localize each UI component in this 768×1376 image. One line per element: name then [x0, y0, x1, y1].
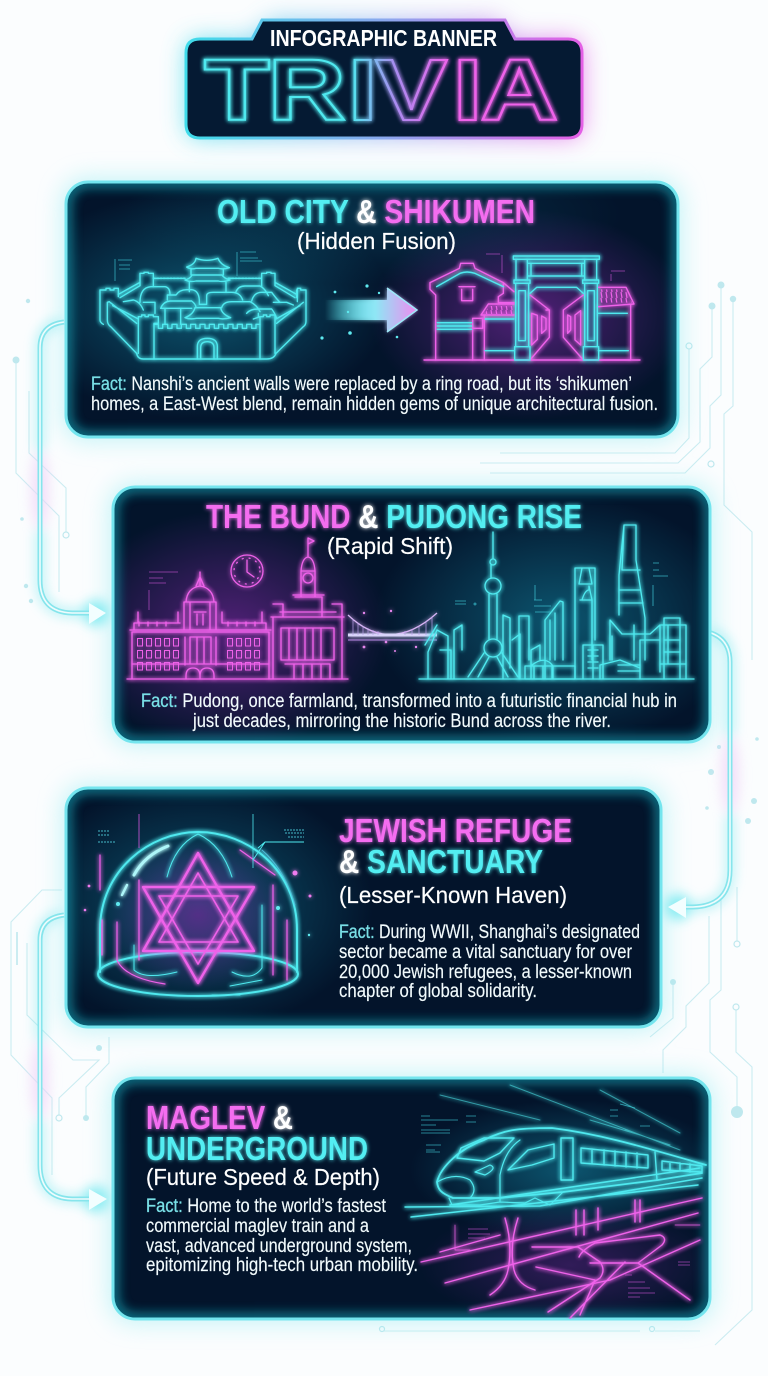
panel: old city and shikumen — [64, 180, 680, 438]
illustration: river bridge — [348, 610, 437, 652]
fact text: vast, advanced underground system, — [146, 1236, 412, 1257]
fact text: chapter of global solidarity. — [339, 981, 537, 1002]
panel: the bund and pudong rise — [112, 486, 712, 744]
subtitle: (Hidden Fusion) — [297, 228, 456, 254]
illustration: walled old city — [100, 258, 306, 359]
illustration: underground network — [421, 1198, 702, 1318]
annotation marks: old city — [115, 252, 262, 281]
fact text: Fact: During WWII, Shanghai’s designated — [339, 922, 640, 943]
fact text — [141, 691, 677, 732]
fact text: 20,000 Jewish refugees, a lesser-known — [339, 962, 632, 983]
heading: JEWISH REFUGE — [339, 812, 572, 849]
arrow: old to new — [320, 284, 417, 340]
heading: OLD CITY & SHIKUMEN — [217, 193, 535, 230]
heading — [339, 812, 572, 880]
panel glow halos — [62, 178, 714, 1323]
arrow: panel 1 to panel 2 — [40, 322, 106, 624]
annotation marks: shikumen — [486, 254, 625, 281]
background circuit traces — [11, 282, 759, 1345]
annotation marks: pudong — [455, 563, 668, 612]
panel: jewish refuge and sanctuary — [23, 780, 661, 1030]
connector glow — [31, 322, 739, 1212]
panel: maglev and underground — [113, 1078, 730, 1325]
fact text: Fact: Pudong, once farmland, transformed into a futuristic financial hub in — [141, 691, 677, 712]
fact text: Fact: Nanshi’s ancient walls were replaced by a ring road, but its ‘shikumen’ — [91, 374, 632, 395]
fact text: Fact: Home to the world’s fastest — [146, 1196, 387, 1217]
fact text: sector became a vital sanctuary for over — [339, 942, 633, 963]
sparkles and annotation marks — [84, 814, 312, 936]
subtitle: (Rapid Shift) — [327, 533, 453, 559]
illustration: bund buildings — [127, 538, 348, 679]
fact text: homes, a East-West blend, remain hidden gems of unique architectural fusion. — [91, 394, 658, 415]
banner label: INFOGRAPHIC BANNER — [270, 25, 497, 51]
fact text — [339, 922, 640, 1002]
illustration: shikumen houses and gate — [424, 256, 640, 360]
subtitle: (Lesser-Known Haven) — [339, 882, 567, 908]
heading: THE BUND & PUDONG RISE — [206, 498, 582, 535]
illustration: pudong skyline — [419, 525, 694, 679]
annotation marks: train — [421, 1104, 690, 1297]
heading: & SANCTUARY — [339, 843, 543, 880]
fact text: epitomizing high-tech urban mobility. — [146, 1255, 418, 1276]
illustration: maglev train — [405, 1085, 706, 1217]
banner word: TRIVIA: TRIVIA — [204, 41, 559, 139]
banner — [186, 20, 582, 139]
icon: clock — [231, 555, 263, 587]
annotation marks: bund — [149, 572, 178, 610]
heading — [146, 1099, 368, 1167]
arrow: panel 2 to panel 3 — [668, 632, 730, 918]
fact text: commercial maglev train and a — [146, 1216, 369, 1237]
icon: glass dome — [98, 832, 298, 996]
subtitle: (Future Speed & Depth) — [146, 1164, 380, 1190]
windows: bund — [136, 637, 262, 673]
fact text: just decades, mirroring the historic Bund across the river. — [192, 711, 611, 732]
heading: MAGLEV & — [146, 1099, 293, 1136]
arrow: panel 3 to panel 4 — [40, 915, 107, 1210]
fact text — [91, 374, 658, 415]
icon: star of david — [143, 853, 254, 983]
heading: UNDERGROUND — [146, 1130, 368, 1167]
fact text — [146, 1196, 418, 1276]
